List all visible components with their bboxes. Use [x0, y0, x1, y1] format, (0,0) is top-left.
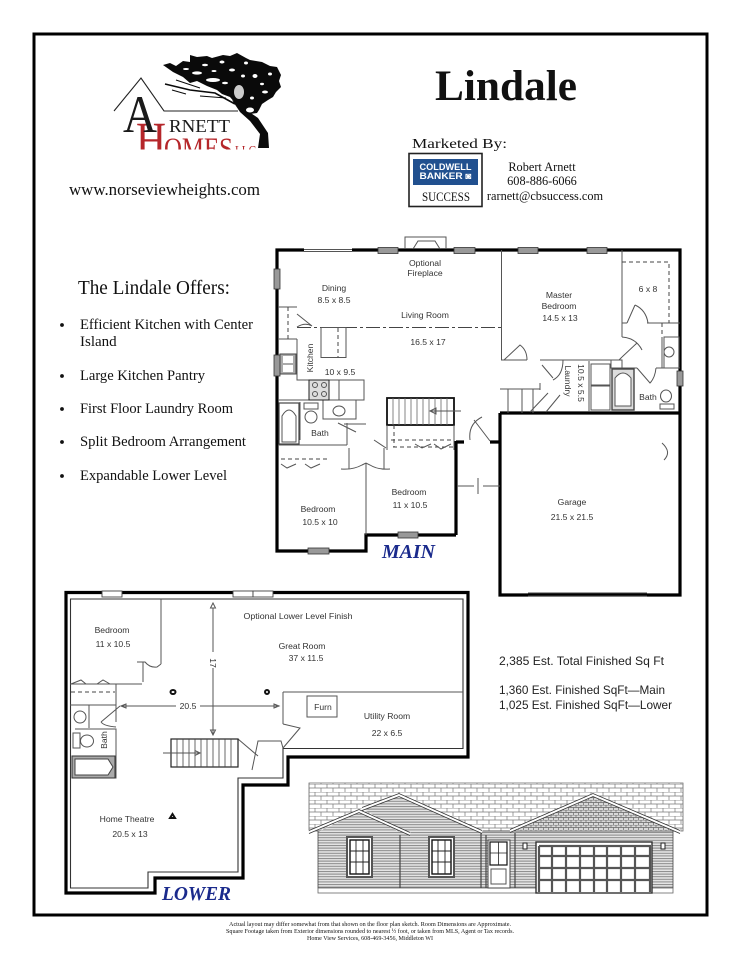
stair: main [387, 398, 461, 450]
floor plan: main level [274, 237, 683, 596]
marketed by block [409, 136, 603, 206]
furnace [307, 696, 337, 717]
main level room labels: 6 x 8 [639, 284, 658, 294]
dimension lines: 17 [208, 658, 218, 668]
icon: tree [163, 53, 281, 148]
support posts [170, 690, 269, 818]
logo letters: RNETT [169, 116, 230, 136]
lower level room labels: 20.5 x 13 [112, 829, 148, 839]
lower level room labels: 37 x 11.5 [289, 653, 324, 663]
square footage stats: 1,025 Est. Finished SqFt—Lower [499, 698, 672, 712]
agent contact: Robert Arnett [508, 160, 576, 174]
fireplace [405, 237, 446, 249]
lower level tag: LOWER [161, 883, 231, 905]
features list: Large Kitchen Pantry [80, 368, 205, 384]
lower level room labels: Utility Room [364, 711, 410, 721]
square footage stats: 1,360 Est. Finished SqFt—Main [499, 683, 665, 697]
trim columns [400, 833, 515, 888]
front door [488, 840, 510, 888]
features list: Efficient Kitchen with Center [80, 317, 253, 333]
agent contact: 608-886-6066 [507, 174, 577, 188]
lower level walls [66, 592, 468, 893]
main level room labels: 16.5 x 17 [410, 337, 446, 347]
lower level room labels: Optional Lower Level Finish [244, 611, 353, 621]
main level room labels: Garage [558, 497, 587, 507]
floor plan: lower level [66, 591, 468, 905]
Coldwell Banker logo: BANKER ◙ [420, 171, 472, 181]
main level room labels: Optional [409, 258, 441, 268]
lower level room labels: Bath [99, 731, 109, 749]
main level room labels: Kitchen [305, 343, 315, 372]
features list: Split Bedroom Arrangement [80, 434, 247, 450]
lower level room labels: 11 x 10.5 [96, 639, 131, 649]
agent contact: rarnett@cbsuccess.com [487, 189, 603, 203]
main level room labels: Bath [311, 428, 329, 438]
icon: house roof line [114, 78, 238, 111]
features heading: The Lindale Offers: [78, 277, 230, 299]
main level room labels [301, 258, 658, 527]
main level room labels: Laundry [563, 365, 573, 397]
bath fixtures [279, 337, 679, 444]
main level walls [277, 250, 680, 595]
logo letters [123, 86, 258, 170]
kitchen fixtures [280, 328, 346, 400]
lower level room labels: Great Room [279, 641, 325, 651]
main level room labels: 8.5 x 8.5 [318, 295, 351, 305]
doors [281, 305, 668, 469]
main level tag: MAIN [381, 541, 437, 563]
lower level room labels: Home Theatre [100, 814, 155, 824]
features list: Island [80, 334, 117, 350]
roof [309, 783, 683, 831]
front elevation drawing [309, 783, 683, 893]
windows [102, 591, 273, 597]
disclaimer footnote: Home View Services, 608-469-3456, Middleton WI [307, 935, 433, 942]
lower bath fixtures [72, 711, 115, 778]
window right [429, 837, 454, 877]
lower level room labels: Furn [314, 702, 332, 712]
gables [309, 794, 680, 836]
agent contact [487, 160, 603, 203]
Coldwell Banker logo [409, 154, 482, 206]
disclaimer footnote: Square Footage taken from Exterior dimensions rounded to nearest ½ foot, or taken from MLS, Agent or Tax records. [226, 928, 514, 935]
features list: First Floor Laundry Room [80, 401, 233, 417]
disclaimer footnote: Actual layout may differ somewhat from that shown on the floor plan sketch. Room Dimensions are Approximate. [229, 921, 511, 928]
main level room labels: Dining [322, 283, 346, 293]
logo letters: OMES [164, 132, 233, 165]
dimension lines [121, 603, 279, 735]
dimension lines: 20.5 [180, 701, 197, 711]
main level room labels: 14.5 x 13 [542, 313, 578, 323]
main level room labels: 11 x 10.5 [393, 500, 428, 510]
lower level room labels: Bedroom [95, 625, 129, 635]
lower level room labels [95, 611, 410, 839]
lights [523, 843, 665, 849]
main level room labels: Bedroom [392, 487, 426, 497]
features list: Expandable Lower Level [80, 468, 227, 484]
kitchen dash-dot beam line [297, 326, 501, 328]
window left [347, 837, 372, 877]
logo letters: H [136, 113, 166, 170]
main level room labels: Bedroom [301, 504, 335, 514]
main level room labels: Bedroom [542, 301, 576, 311]
garage door [536, 842, 652, 893]
logo letters: A [123, 86, 157, 144]
main level room labels: 10.5 x 10 [302, 517, 338, 527]
stair: lower [163, 739, 238, 767]
main level room labels: Fireplace [407, 268, 443, 278]
square footage stats: 2,385 Est. Total Finished Sq Ft [499, 654, 665, 668]
logo: Arnett Homes [114, 53, 281, 170]
features list [60, 277, 253, 484]
main level room labels: Bath [639, 392, 657, 402]
disclaimer footnote [226, 921, 514, 942]
main level room labels: 10 x 9.5 [325, 367, 356, 377]
lower level room labels: 22 x 6.5 [372, 728, 403, 738]
siding [318, 831, 673, 888]
square footage stats [499, 654, 672, 712]
website: www.norseviewheights.com [69, 180, 260, 199]
logo letters: LLC [235, 144, 256, 159]
main level room labels: Living Room [401, 310, 449, 320]
Coldwell Banker logo: SUCCESS [422, 190, 470, 204]
windows [274, 248, 683, 596]
main level room labels: 10.5 x 5.5 [576, 364, 586, 402]
Coldwell Banker logo: COLDWELL [420, 162, 472, 172]
marketed by label: Marketed By: [412, 136, 507, 151]
main level room labels: Master [546, 290, 572, 300]
main level room labels: 21.5 x 21.5 [551, 512, 593, 522]
title: Lindale [435, 62, 577, 110]
